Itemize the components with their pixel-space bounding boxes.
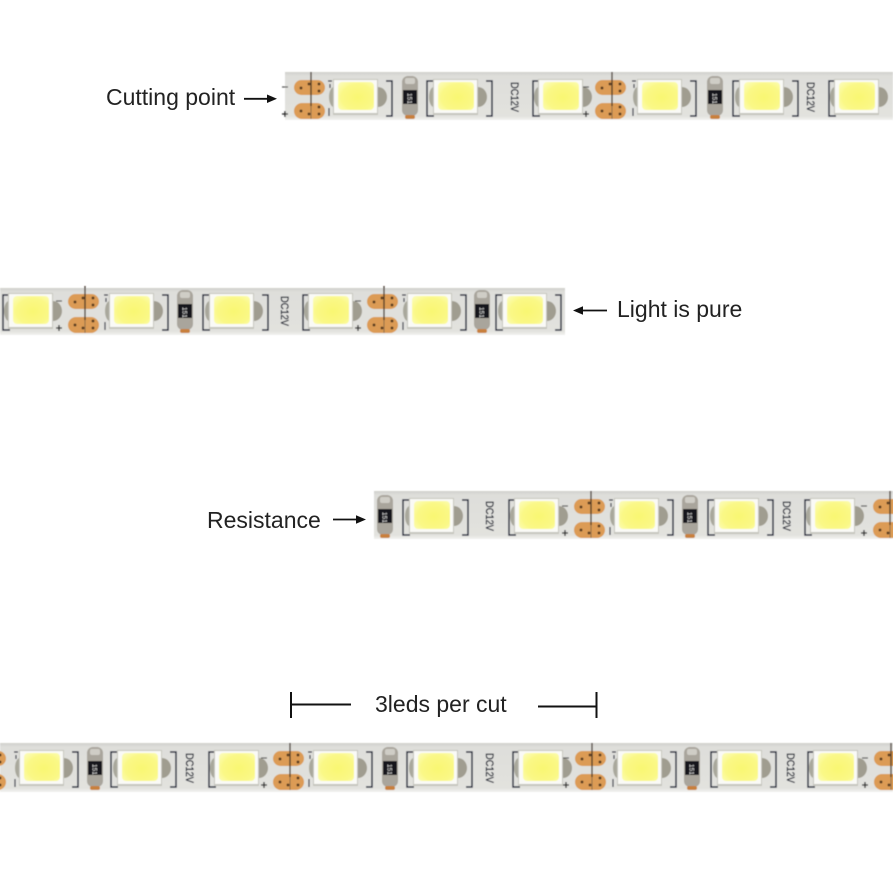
LED — [829, 79, 888, 116]
arrow: resistance — [333, 515, 366, 524]
resistor — [684, 747, 700, 790]
LED — [808, 750, 867, 787]
LED — [612, 750, 676, 787]
cutting pad — [355, 286, 398, 333]
LED — [14, 750, 78, 787]
LED — [509, 498, 568, 535]
LED — [303, 293, 362, 330]
DC12V marking — [508, 82, 520, 113]
LED — [203, 293, 268, 330]
LED — [111, 750, 176, 787]
DC12V marking — [780, 501, 792, 532]
resistor — [402, 76, 418, 119]
arrow: cutting point — [244, 94, 277, 103]
resistor — [382, 747, 398, 790]
DC12V marking — [784, 753, 796, 784]
cutting pad — [861, 491, 893, 538]
LED — [513, 750, 572, 787]
LED strip 3 — [374, 491, 893, 539]
DC12V marking — [278, 296, 290, 327]
DC12V marking — [804, 82, 816, 113]
arrow: light is pure — [573, 306, 607, 315]
LED — [533, 79, 592, 116]
dimension: right bracket — [538, 692, 597, 718]
cutting pad — [261, 743, 304, 790]
LED — [632, 79, 696, 116]
LED — [805, 498, 864, 535]
LED — [308, 750, 372, 787]
cutting pad — [56, 286, 99, 333]
LED — [711, 750, 776, 787]
label: Light is pure: Light is pure — [617, 296, 742, 322]
DC12V marking — [483, 753, 495, 784]
LED — [402, 293, 466, 330]
LED strip 1 — [282, 72, 893, 120]
LED — [328, 79, 392, 116]
LED — [104, 293, 168, 330]
resistor — [87, 747, 103, 790]
resistor — [682, 495, 698, 538]
DC12V marking — [483, 501, 495, 532]
LED — [407, 750, 472, 787]
LED strip 4 — [0, 743, 893, 792]
LED strip 2 — [0, 286, 565, 335]
LED — [403, 498, 468, 535]
cutting pad — [282, 72, 325, 119]
resistor — [474, 290, 490, 333]
resistor — [377, 495, 393, 538]
label: Resistance: Resistance — [207, 507, 321, 533]
LED — [708, 498, 773, 535]
cutting pad — [563, 743, 606, 790]
LED — [209, 750, 268, 787]
cutting pad — [562, 491, 605, 538]
DC12V marking — [183, 753, 195, 784]
LED — [733, 79, 798, 116]
cutting pad — [0, 743, 6, 790]
dimension: left bracket — [291, 692, 351, 718]
cutting pad — [862, 743, 893, 790]
label: 3leds per cut: 3leds per cut — [375, 691, 507, 717]
LED — [496, 293, 561, 330]
resistor — [177, 290, 193, 333]
LED — [609, 498, 673, 535]
resistor — [707, 76, 723, 119]
cutting pad — [583, 72, 626, 119]
LED — [427, 79, 492, 116]
label: Cutting point: Cutting point — [106, 84, 236, 110]
LED — [3, 293, 62, 330]
